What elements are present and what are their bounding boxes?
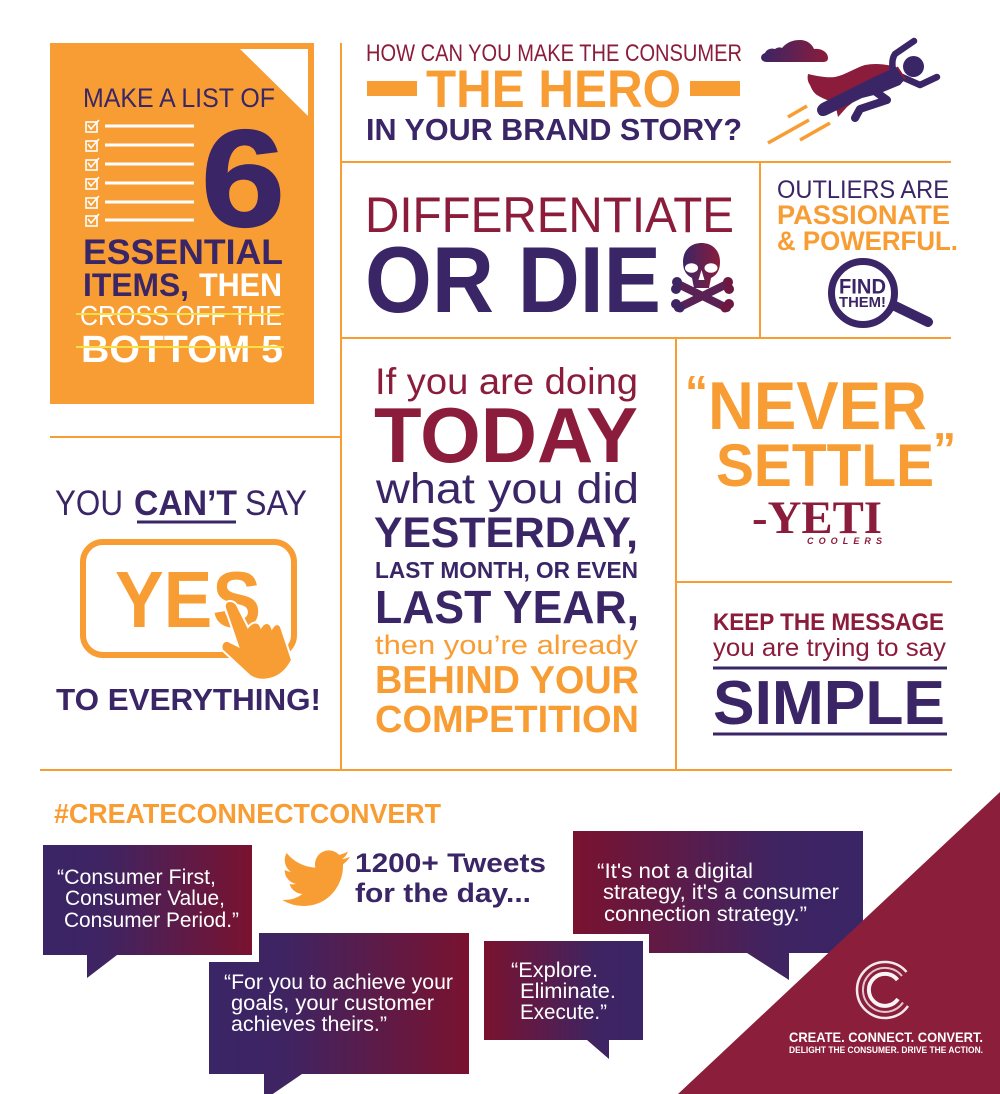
speech bubble: achieve your goals (209, 933, 469, 1094)
text: say: SAY (245, 484, 307, 523)
speech bubble: digital strategy (573, 831, 863, 980)
speech bubble: consumer first: “Consumer First, (57, 866, 216, 889)
speech bubble: explore eliminate execute (484, 941, 643, 1059)
text: settle: SETTLE (716, 432, 934, 499)
heading: make a list of: MAKE A LIST OF (83, 83, 275, 113)
text: the hero: THE HERO (426, 60, 681, 119)
icon: flying superhero (768, 41, 937, 143)
panel: differentiate or die (365, 187, 734, 332)
logo: concentric C (857, 962, 908, 1018)
panel: never settle quote (685, 366, 956, 546)
icon: skull and crossbones (671, 243, 734, 312)
text: passionate: PASSIONATE (777, 200, 950, 230)
text: yesterday: YESTERDAY, (374, 509, 638, 557)
panel: outliers (777, 176, 958, 324)
icon: cloud (761, 40, 828, 62)
panel: can't say yes (55, 484, 321, 717)
text: last year: LAST YEAR, (375, 581, 639, 633)
speech bubble: consumer first: Consumer Value, (65, 887, 225, 910)
panel: make a list of 6 (50, 43, 314, 404)
icon: twitter bird (282, 850, 350, 906)
text: yes: YES (115, 555, 261, 644)
text: them: THEM! (839, 295, 886, 311)
text: in your brand story: IN YOUR BRAND STORY? (366, 112, 742, 147)
text: and powerful: & POWERFUL. (777, 226, 958, 256)
text: competition: COMPETITION (375, 699, 639, 741)
speech bubble: explore eliminate execute: “Explore. (511, 959, 598, 982)
text: simple: SIMPLE (713, 669, 945, 738)
panel: hero question (366, 40, 937, 147)
icon: yes button (83, 542, 294, 655)
panel: today statement (374, 361, 639, 741)
speech bubble: achieve your goals: “For you to achieve your (224, 971, 453, 994)
bar left (367, 81, 417, 96)
text: then you're already: then you’re already (375, 630, 639, 660)
text: items,: ITEMS, (83, 267, 189, 303)
icon: pointing hand (221, 601, 292, 680)
text: find: FIND (839, 276, 886, 298)
logo: yeti coolers: COOLERS (807, 536, 882, 546)
text: delight the consumer: DELIGHT THE CONSUMER. DRIVE THE ACTION. (789, 1045, 983, 1055)
speech bubble: consumer first (43, 845, 252, 978)
text: today: TODAY (374, 391, 638, 479)
text: closing quote: ” (933, 423, 956, 475)
panel: keep the message simple (713, 609, 947, 738)
text: then: THEN (199, 267, 282, 303)
folded corner (240, 49, 308, 116)
text: how can you make the consumer: HOW CAN YOU MAKE THE CONSUMER (366, 40, 742, 67)
text: differentiate: DIFFERENTIATE (365, 187, 734, 243)
text: create connect convert: CREATE. CONNECT. CONVERT. (789, 1029, 983, 1045)
big number 6: 6 (201, 102, 285, 256)
text: what you did: what you did (375, 465, 639, 513)
text: opening quote: “ (685, 366, 708, 418)
text: bottom 5: BOTTOM 5 (81, 329, 283, 371)
text: last month or even: LAST MONTH, OR EVEN (375, 557, 638, 583)
panel: brand corner triangle (678, 792, 1000, 1094)
text: never: NEVER (708, 368, 927, 444)
text: to everything: TO EVERYTHING! (56, 682, 321, 717)
speech bubble: achieve your goals: goals, your customer (231, 992, 434, 1015)
checklist icon (86, 120, 194, 226)
text: cross off the: CROSS OFF THE (80, 300, 282, 331)
speech bubble: digital strategy: “It's not a digital (597, 860, 753, 883)
text: or die: OR DIE (365, 227, 661, 332)
text: you are trying to say: you are trying to say (713, 634, 947, 662)
text: you: YOU (55, 484, 123, 523)
speech bubble: digital strategy: connection strategy.” (604, 903, 807, 926)
text: outliers are: OUTLIERS ARE (777, 176, 949, 204)
text: if you are doing: If you are doing (375, 361, 638, 402)
speech bubble: digital strategy: strategy, it's a consumer (603, 881, 839, 904)
speech bubble: explore eliminate execute: Execute.” (520, 1001, 607, 1024)
text: can't: CAN’T (134, 484, 237, 523)
speech bubble: consumer first: Consumer Period.” (64, 909, 239, 932)
text: tweet count (355, 848, 546, 908)
text: essential: ESSENTIAL (83, 233, 283, 272)
speech bubble: achieve your goals: achieves theirs.” (231, 1013, 387, 1036)
text: tweet count: 1200+ Tweets (355, 848, 546, 878)
text: behind your: BEHIND YOUR (375, 659, 639, 702)
hashtag heading: #CREATECONNECTCONVERT (54, 798, 441, 829)
text: keep the message: KEEP THE MESSAGE (713, 609, 944, 636)
speech bubble: explore eliminate execute: Eliminate. (520, 980, 616, 1003)
bar right (690, 81, 740, 96)
logo: yeti coolers: -YETI (752, 492, 882, 544)
icon: magnifying glass (832, 262, 928, 324)
text: tweet count: for the day... (355, 878, 531, 908)
